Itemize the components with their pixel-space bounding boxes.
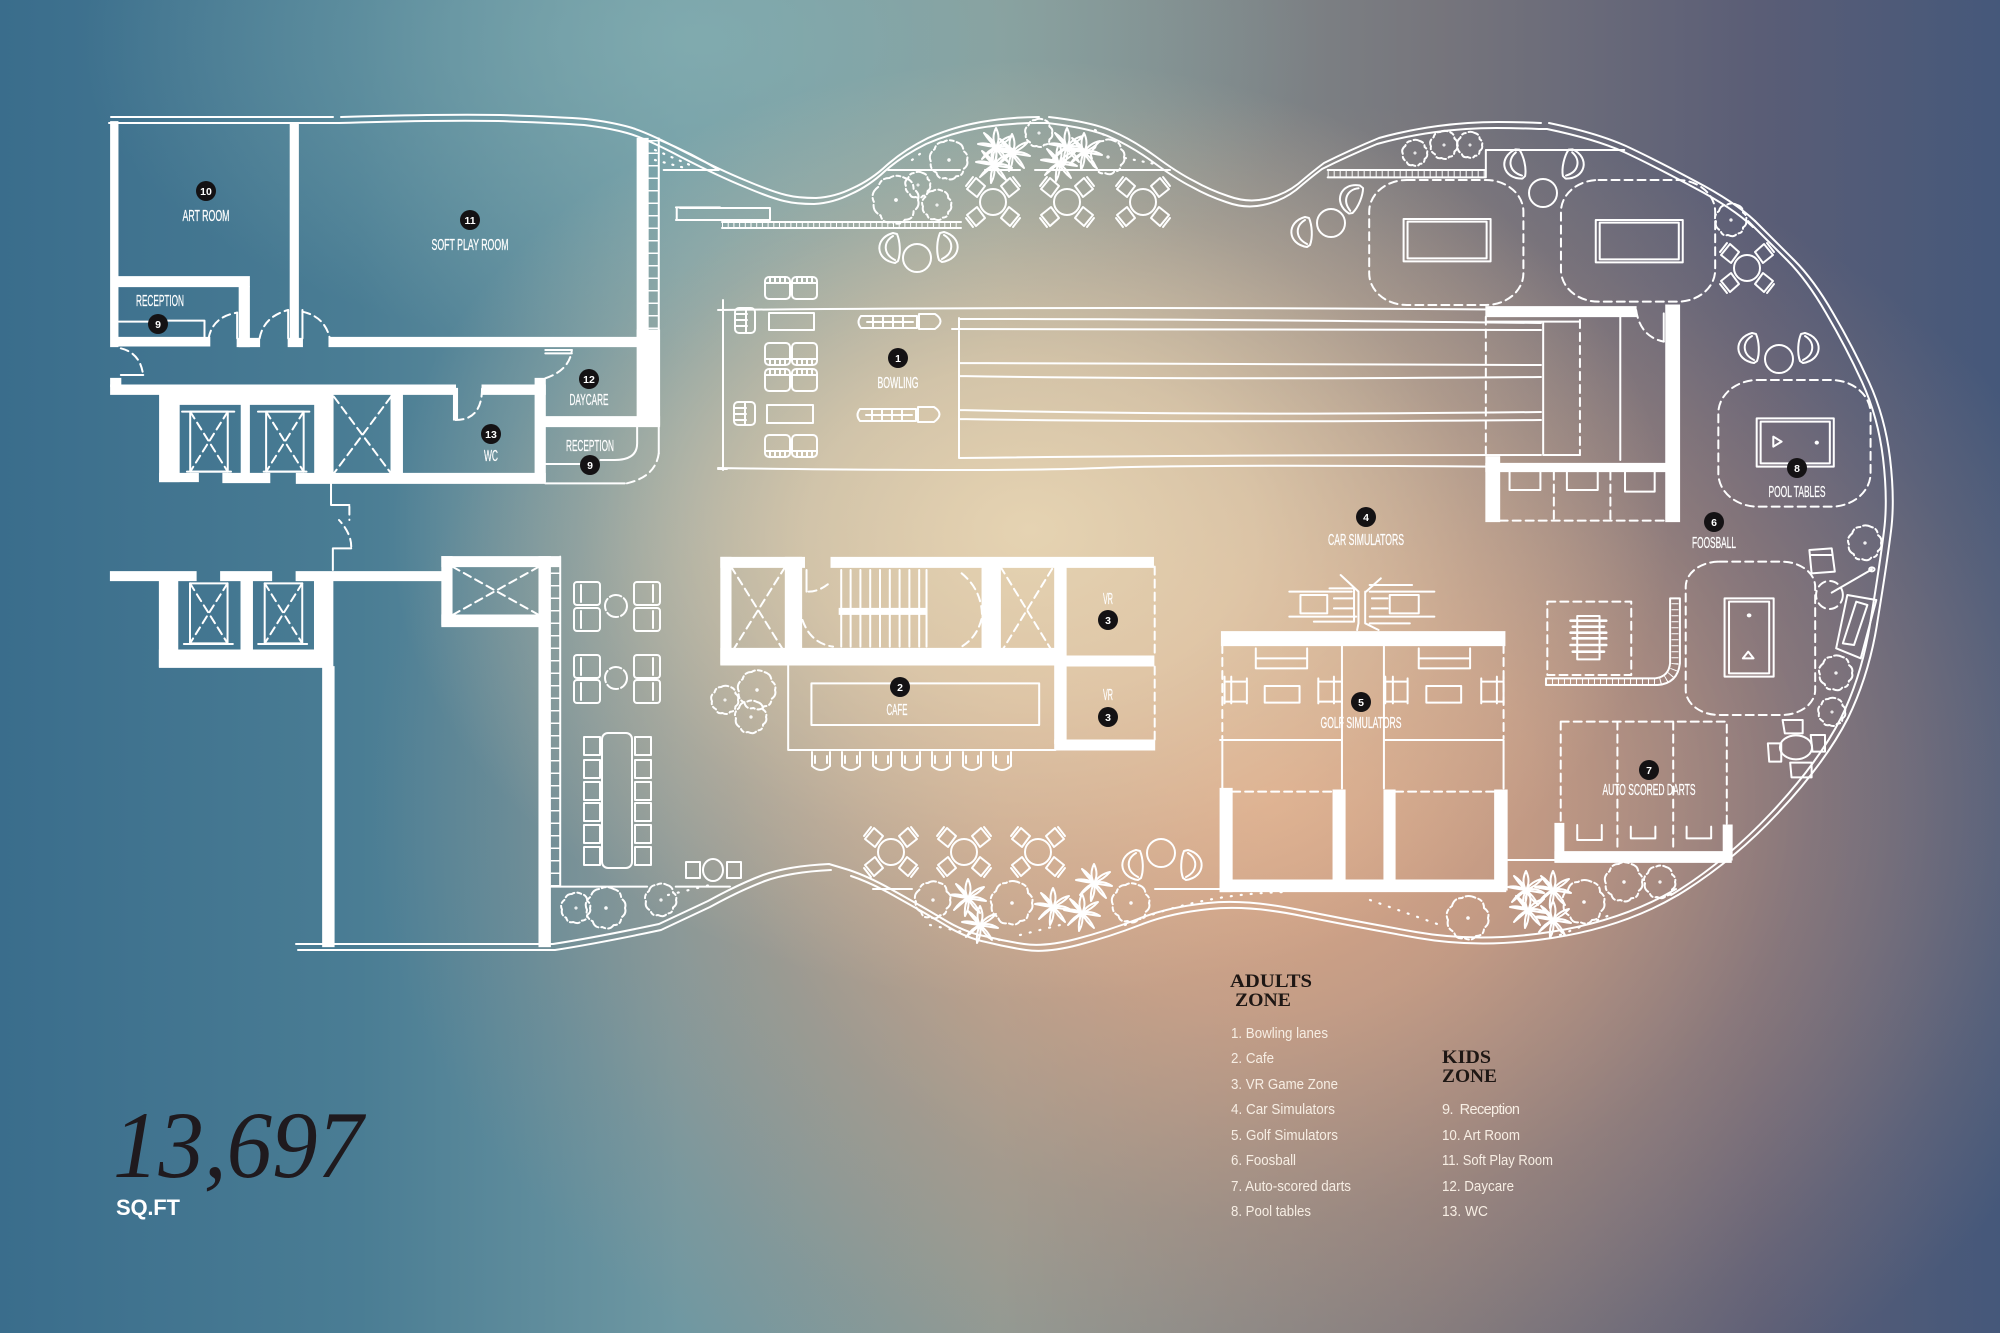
room label: pool tables: POOL TABLES — [1768, 484, 1826, 501]
legend: adults zone: 3. VR Game Zone — [1231, 1077, 1338, 1093]
room label: vr two: VR — [1103, 687, 1113, 704]
bowling lanes — [718, 277, 1560, 470]
legend: kids zone: 11. Soft Play Room — [1442, 1153, 1553, 1169]
room label: reception — [566, 438, 614, 475]
legend: kids zone: 12. Daycare — [1442, 1179, 1514, 1195]
golf, foosball and darts areas — [1220, 548, 1876, 892]
room label: auto scored darts: AUTO SCORED DARTS — [1602, 782, 1696, 799]
core stairs, cafe and VR rooms — [721, 557, 1155, 750]
room label: vr one — [1098, 591, 1118, 630]
legend: kids zone: KIDS — [1442, 1047, 1491, 1068]
upper right furniture — [1291, 131, 1819, 373]
room label: car simulators: CAR SIMULATORS — [1328, 532, 1404, 549]
room label: foosball: FOOSBALL — [1692, 535, 1736, 552]
legend: adults zone: 7. Auto-scored darts — [1231, 1179, 1351, 1195]
room label: foosball — [1692, 512, 1736, 552]
legend: adults zone: 8. Pool tables — [1231, 1204, 1311, 1220]
room label: reception: 9 — [587, 460, 593, 472]
room label: vr two: 3 — [1105, 712, 1111, 724]
room label: kids reception: RECEPTION — [136, 293, 184, 310]
legend: adults zone: 1. Bowling lanes — [1231, 1026, 1328, 1042]
area figure: SQ.FT — [116, 1195, 181, 1220]
room label: pool tables: 8 — [1794, 463, 1800, 475]
legend: kids zone: ZONE — [1442, 1066, 1497, 1087]
legend: adults zone: ZONE — [1235, 990, 1291, 1011]
legend: kids zone: 9. Reception — [1442, 1102, 1520, 1118]
room label: pool tables — [1768, 458, 1826, 501]
room label: daycare: 12 — [583, 374, 595, 386]
room label: vr one: 3 — [1105, 615, 1111, 627]
room label: soft play room: SOFT PLAY ROOM — [432, 237, 508, 254]
room label: kids reception: 9 — [155, 319, 161, 331]
room label: foosball: 6 — [1711, 517, 1717, 529]
room label: daycare: DAYCARE — [570, 392, 608, 409]
legend: kids zone — [1442, 1047, 1553, 1220]
room label: art room: 10 — [200, 186, 212, 198]
room label: bowling — [878, 348, 918, 392]
room label: kids reception — [136, 293, 184, 334]
room label: car simulators: 4 — [1363, 512, 1369, 524]
room label: auto scored darts — [1602, 760, 1696, 799]
room label: bowling: BOWLING — [878, 375, 918, 392]
room label: soft play room — [432, 210, 508, 254]
room label: wc: WC — [484, 448, 498, 465]
legend: kids zone: 13. WC — [1442, 1204, 1488, 1220]
room label: auto scored darts: 7 — [1646, 765, 1652, 777]
legend: adults zone — [1230, 971, 1351, 1220]
room label: bowling: 1 — [895, 353, 901, 365]
room label: golf simulators: 5 — [1358, 697, 1364, 709]
legend: adults zone: 5. Golf Simulators — [1231, 1128, 1338, 1144]
room label: reception: RECEPTION — [566, 438, 614, 455]
legend: adults zone: 4. Car Simulators — [1231, 1102, 1335, 1118]
room label: vr two — [1098, 687, 1118, 727]
room label: daycare — [570, 369, 608, 409]
legend: adults zone: 6. Foosball — [1231, 1153, 1296, 1169]
lower left wing walls — [110, 520, 730, 947]
building outline — [109, 115, 1893, 951]
room label: art room — [182, 181, 230, 225]
area figure: 13,697 — [113, 1092, 366, 1198]
room label: car simulators — [1328, 507, 1404, 549]
room label: wc — [481, 424, 501, 465]
room label: cafe: CAFE — [886, 702, 908, 719]
upper right lounge and pool zone — [1328, 150, 1871, 522]
room label: art room: ART ROOM — [182, 208, 230, 225]
room label: cafe: 2 — [897, 682, 903, 694]
room label: wc: 13 — [485, 429, 497, 441]
room label: vr one: VR — [1103, 591, 1113, 608]
room label: golf simulators: GOLF SIMULATORS — [1320, 715, 1402, 732]
room label: soft play room: 11 — [464, 215, 476, 227]
legend: kids zone: 10. Art Room — [1442, 1128, 1520, 1144]
soft seating and long table — [574, 582, 741, 881]
room label: cafe — [886, 677, 910, 719]
kids zone walls — [111, 122, 720, 520]
legend: adults zone: 2. Cafe — [1231, 1051, 1274, 1067]
top garden and cafe terrace — [655, 119, 1170, 272]
room label: golf simulators — [1320, 692, 1402, 732]
legend: adults zone: ADULTS — [1230, 971, 1312, 992]
cafe stools, tables and plants — [561, 670, 1290, 943]
lower right garden — [1370, 525, 1881, 940]
